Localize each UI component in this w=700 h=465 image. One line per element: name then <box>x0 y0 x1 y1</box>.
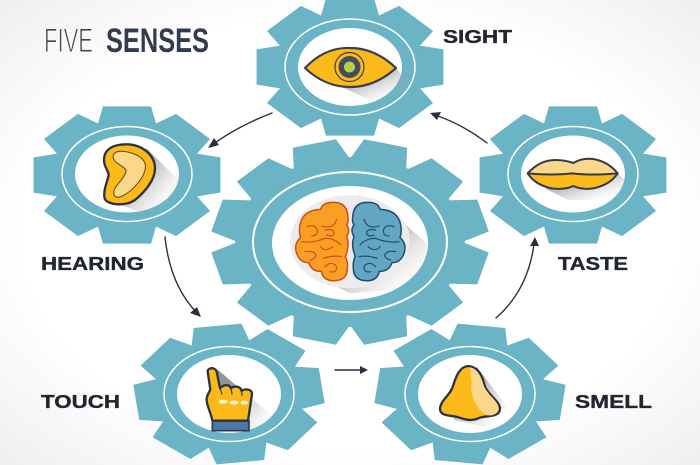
label: sight: SIGHT <box>443 27 512 47</box>
center gear: brain <box>209 138 491 346</box>
icon: eye <box>305 48 408 100</box>
arrow: touch to smell <box>335 366 368 374</box>
label: hearing: HEARING <box>41 254 144 274</box>
label: touch: TOUCH <box>41 392 120 412</box>
gear: sight <box>257 0 443 136</box>
arrow: smell to taste <box>496 237 539 318</box>
label: smell: SMELL <box>575 392 652 412</box>
title: FIVE <box>44 22 93 60</box>
icon: nose <box>440 366 513 427</box>
arrow: hearing to touch <box>165 237 201 317</box>
label: taste: TASTE <box>558 254 628 274</box>
gear: taste <box>480 106 666 244</box>
gear: touch <box>125 317 333 465</box>
arrow: taste to sight <box>430 112 487 143</box>
icon: brain <box>290 195 427 293</box>
arrow: sight to hearing <box>208 113 272 148</box>
icon: pointing hand <box>207 368 277 433</box>
title <box>44 22 209 60</box>
gear: smell <box>366 317 574 465</box>
icon: lips <box>528 159 625 200</box>
icon: ear <box>104 144 178 212</box>
gear: hearing <box>34 106 220 244</box>
title: SENSES <box>106 22 209 60</box>
